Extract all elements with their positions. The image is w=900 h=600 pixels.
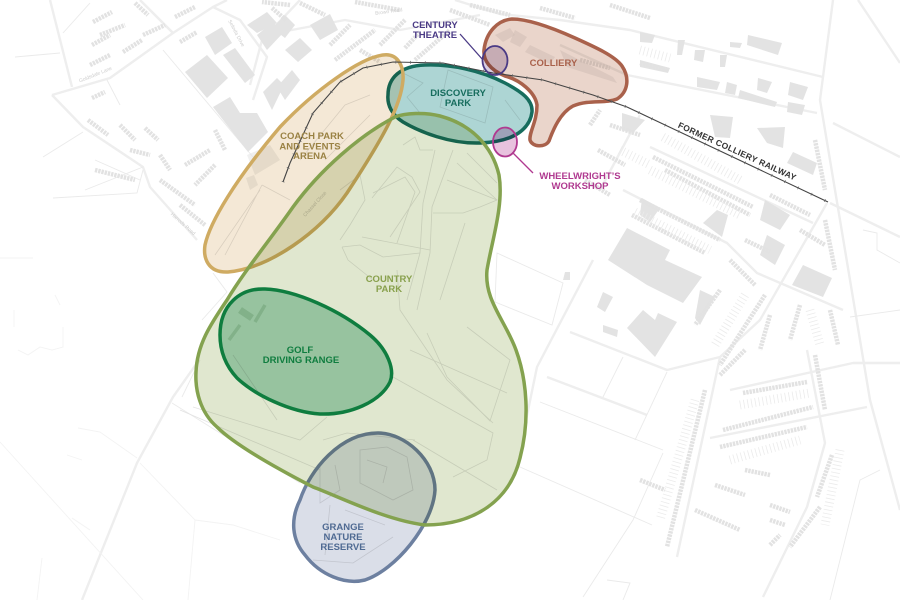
label: wheelwright's workshop: WORKSHOP: [552, 181, 609, 192]
label: discovery park: DISCOVERY: [430, 88, 486, 99]
zone: coach park and events arena: [205, 55, 403, 272]
label: century theatre: THEATRE: [413, 30, 457, 41]
label: colliery: COLLIERY: [530, 58, 578, 69]
label: golf driving range: GOLF: [287, 345, 313, 356]
label: coach park and events arena: AND EVENTS: [279, 142, 341, 152]
zone: colliery: [484, 19, 627, 146]
zone: wheelwright's workshop marker: [493, 128, 533, 173]
road labels: Selinda Drive: [226, 19, 246, 48]
road labels: [78, 7, 403, 237]
label: former colliery railway: FORMER COLLIERY RAILWAY: [677, 120, 798, 183]
label: grange nature reserve: GRANGE: [322, 522, 364, 533]
zone: century theatre marker: [460, 34, 508, 75]
label: coach park and events arena: ARENA: [293, 151, 327, 162]
label: country park: COUNTRY: [366, 274, 413, 285]
label: discovery park: PARK: [445, 98, 471, 109]
label: grange nature reserve: RESERVE: [320, 542, 366, 553]
road labels: Goldsdale Lane: [78, 66, 113, 84]
label: golf driving range: DRIVING RANGE: [263, 355, 339, 366]
former colliery railway line: [283, 62, 828, 202]
road labels: Harrods Road: [169, 212, 196, 237]
label: coach park and events arena: COACH PARK: [280, 131, 344, 142]
zone: country park: [196, 113, 526, 525]
label: country park: PARK: [376, 284, 402, 295]
label: grange nature reserve: NATURE: [324, 532, 362, 543]
zone: discovery park: [388, 65, 532, 143]
road labels: Chassel Close: [302, 190, 328, 218]
label: wheelwright's workshop: WHEELWRIGHT’S: [539, 171, 621, 182]
label: century theatre: CENTURY: [412, 20, 458, 31]
zone: golf driving range: [220, 289, 392, 414]
zone: grange nature reserve: [294, 433, 435, 581]
road labels: Brown Road: [375, 7, 403, 17]
